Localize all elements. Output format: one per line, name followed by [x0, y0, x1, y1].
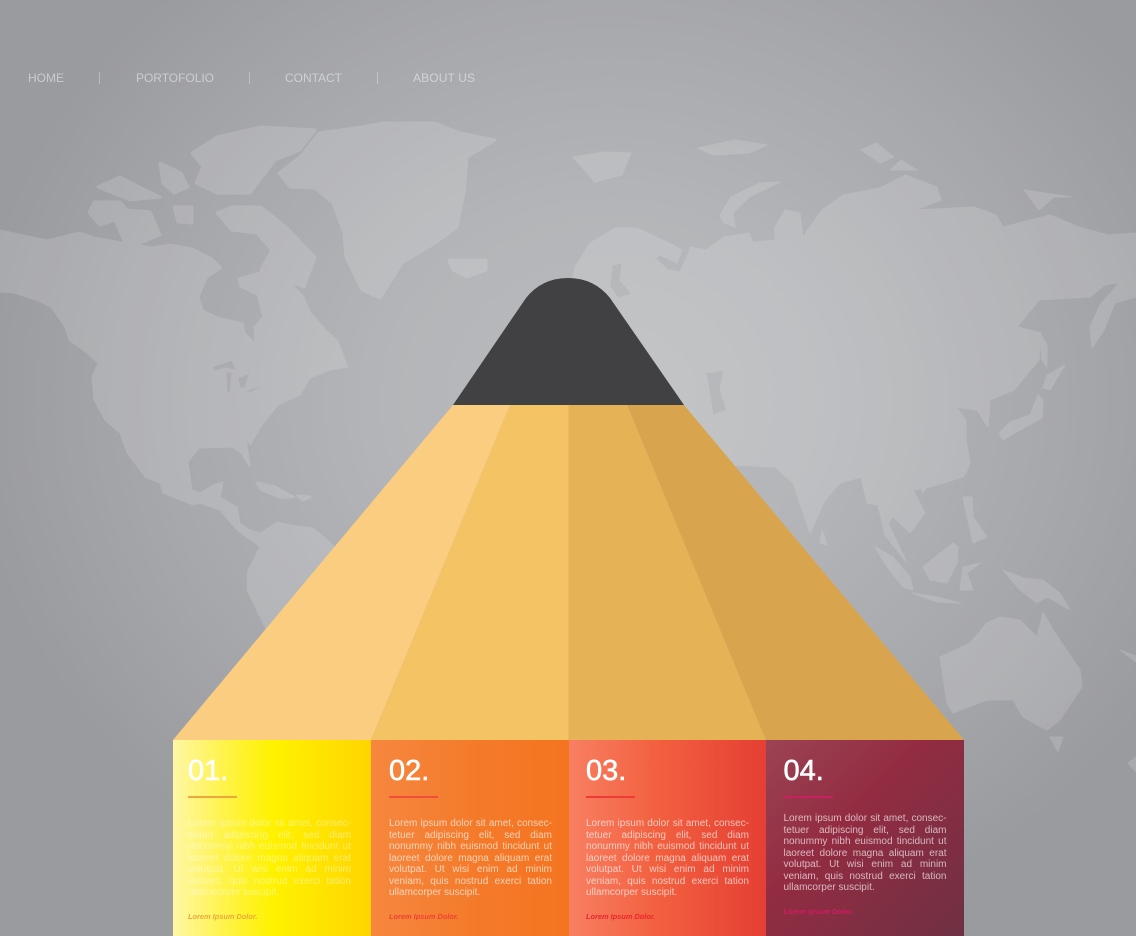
panel: 03 red [568, 740, 766, 936]
map: Americas mainland [0, 230, 400, 680]
body text: Lorem ipsum dolor sit amet, consec- [586, 818, 749, 829]
nav: portofolio: PORTOFOLIO [136, 71, 214, 85]
number 01: 01. [188, 755, 228, 787]
number 04: 04. [784, 755, 824, 787]
body text: veniam, quis nostrud exerci tation [188, 876, 351, 886]
number 02: 02. [389, 755, 429, 787]
nav: home: HOME [28, 71, 64, 85]
panel: 02 orange [371, 740, 568, 936]
accent rule [586, 796, 635, 798]
body text: Lorem ipsum dolor sit amet, consec- [389, 818, 552, 829]
pencil lead tip [453, 278, 684, 405]
map: Australia [940, 612, 1082, 752]
body text: volutpat. Ut wisi enim ad minim [188, 864, 351, 875]
body text: ullamcorper suscipit. [188, 887, 279, 898]
body text: nonummy nibh euismod tincidunt ut [389, 841, 552, 852]
body text [784, 813, 946, 893]
map: Arctic islands and Greenland [89, 123, 495, 500]
body text: nonummy nibh euismod tincidunt ut [784, 836, 946, 847]
nav: contact: CONTACT [285, 71, 343, 85]
body text: laoreet dolore magna aliquam erat [188, 852, 351, 864]
body text: ullamcorper suscipit. [784, 882, 875, 893]
body text: veniam, quis nostrud exerci tation [586, 876, 749, 886]
body text: laoreet dolore magna aliquam erat [784, 848, 946, 858]
body text: volutpat. Ut wisi enim ad minim [784, 859, 946, 870]
nav: separator [99, 72, 100, 84]
body text: veniam, quis nostrud exerci tation [389, 876, 552, 886]
panel: 01 yellow [173, 740, 371, 936]
body text: volutpat. Ut wisi enim ad minim [389, 864, 552, 875]
body text: nonummy nibh euismod tincidunt ut [586, 841, 749, 852]
nav: separator [377, 72, 378, 84]
body text: nonummy nibh euismod tincidunt ut [188, 841, 351, 852]
body text: volutpat. Ut wisi enim ad minim [586, 864, 749, 875]
body text [188, 818, 351, 898]
body text: Lorem ipsum dolor sit amet, consec- [188, 818, 351, 829]
pencil wood: facet 3 [568, 405, 766, 740]
pencil wood: facet 4 [627, 405, 964, 740]
body text: tetuer adipiscing elit, sed diam [188, 830, 351, 840]
nav: separator [249, 72, 250, 84]
signature: Lorem Ipsum Dolor. [389, 912, 458, 921]
body text [586, 818, 749, 898]
signature: Lorem Ipsum Dolor. [188, 912, 257, 921]
body text: ullamcorper suscipit. [586, 887, 677, 898]
accent rule [389, 796, 438, 798]
body text: ullamcorper suscipit. [389, 887, 480, 898]
signature: Lorem Ipsum Dolor. [784, 907, 853, 916]
accent rule [784, 796, 832, 798]
body text: tetuer adipiscing elit, sed diam [784, 824, 946, 836]
accent rule [188, 796, 237, 798]
nav: about us: ABOUT US [413, 71, 475, 85]
body text: tetuer adipiscing elit, sed diam [389, 830, 552, 840]
number 03: 03. [586, 755, 626, 787]
pencil wood: facet 1 [173, 405, 510, 740]
map: Eurasia [568, 175, 1136, 563]
body text: laoreet dolore magna aliquam erat [586, 852, 749, 864]
body text: Lorem ipsum dolor sit amet, consec- [784, 813, 946, 824]
signature: Lorem Ipsum Dolor. [586, 912, 655, 921]
navigation bar [28, 71, 475, 85]
body text: veniam, quis nostrud exerci tation [784, 870, 946, 882]
body text: laoreet dolore magna aliquam erat [389, 852, 552, 864]
body text: tetuer adipiscing elit, sed diam [586, 830, 749, 840]
map: Asia-Pacific islands [573, 140, 1136, 772]
pencil wood: facet 2 [371, 405, 568, 740]
body text [389, 818, 552, 898]
panel: 04 maroon [766, 740, 964, 936]
